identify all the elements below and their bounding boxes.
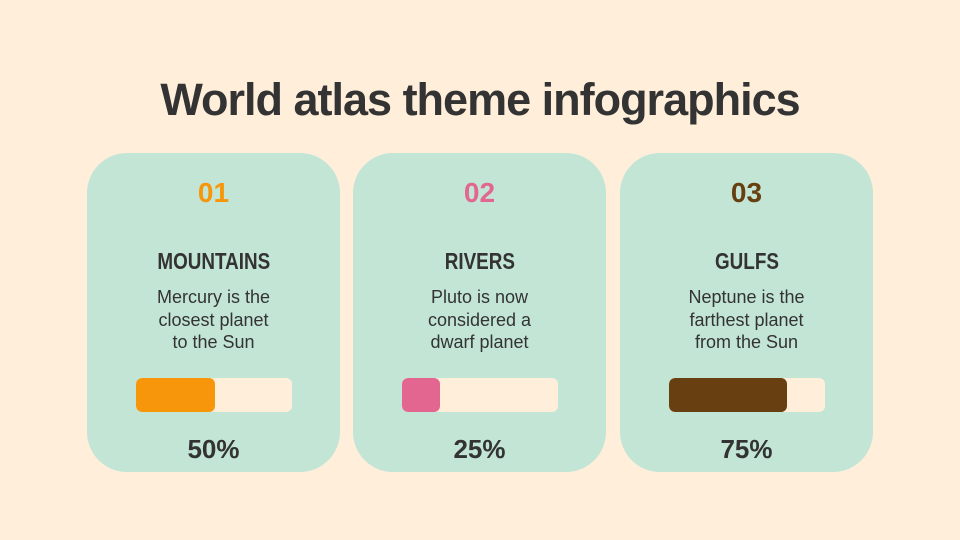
text: neptune: from the Sun <box>695 332 798 352</box>
text: pluto <box>428 287 531 352</box>
text: neptune <box>688 287 805 352</box>
progress bar 75% <box>669 378 825 412</box>
panel: mountains <box>87 153 340 472</box>
panel: gulfs <box>620 153 873 472</box>
percent 25: 25% <box>453 434 506 464</box>
number 02: 02 <box>464 177 495 208</box>
heading: mountains: MOUNTAINS <box>157 248 270 274</box>
panel: rivers <box>353 153 606 472</box>
text: mercury: Mercury is the <box>157 287 270 307</box>
heading: rivers: RIVERS <box>444 248 515 274</box>
title: World atlas theme infographics <box>160 74 800 125</box>
number 03: 03 <box>731 177 762 208</box>
percent 75: 75% <box>720 434 773 464</box>
text: mercury: closest planet <box>158 310 269 330</box>
text: mercury: to the Sun <box>172 332 255 352</box>
heading: gulfs: GULFS <box>715 248 778 274</box>
percent 50: 50% <box>187 434 240 464</box>
text: pluto: considered a <box>428 310 531 330</box>
text: pluto: dwarf planet <box>430 332 529 352</box>
text: mercury <box>157 287 270 352</box>
progress bar 50% <box>136 378 292 412</box>
text: pluto: Pluto is now <box>431 287 528 307</box>
text: neptune: farthest planet <box>689 310 804 330</box>
progress bar 25% <box>402 378 558 412</box>
number 01: 01 <box>198 177 229 208</box>
text: neptune: Neptune is the <box>688 287 805 307</box>
